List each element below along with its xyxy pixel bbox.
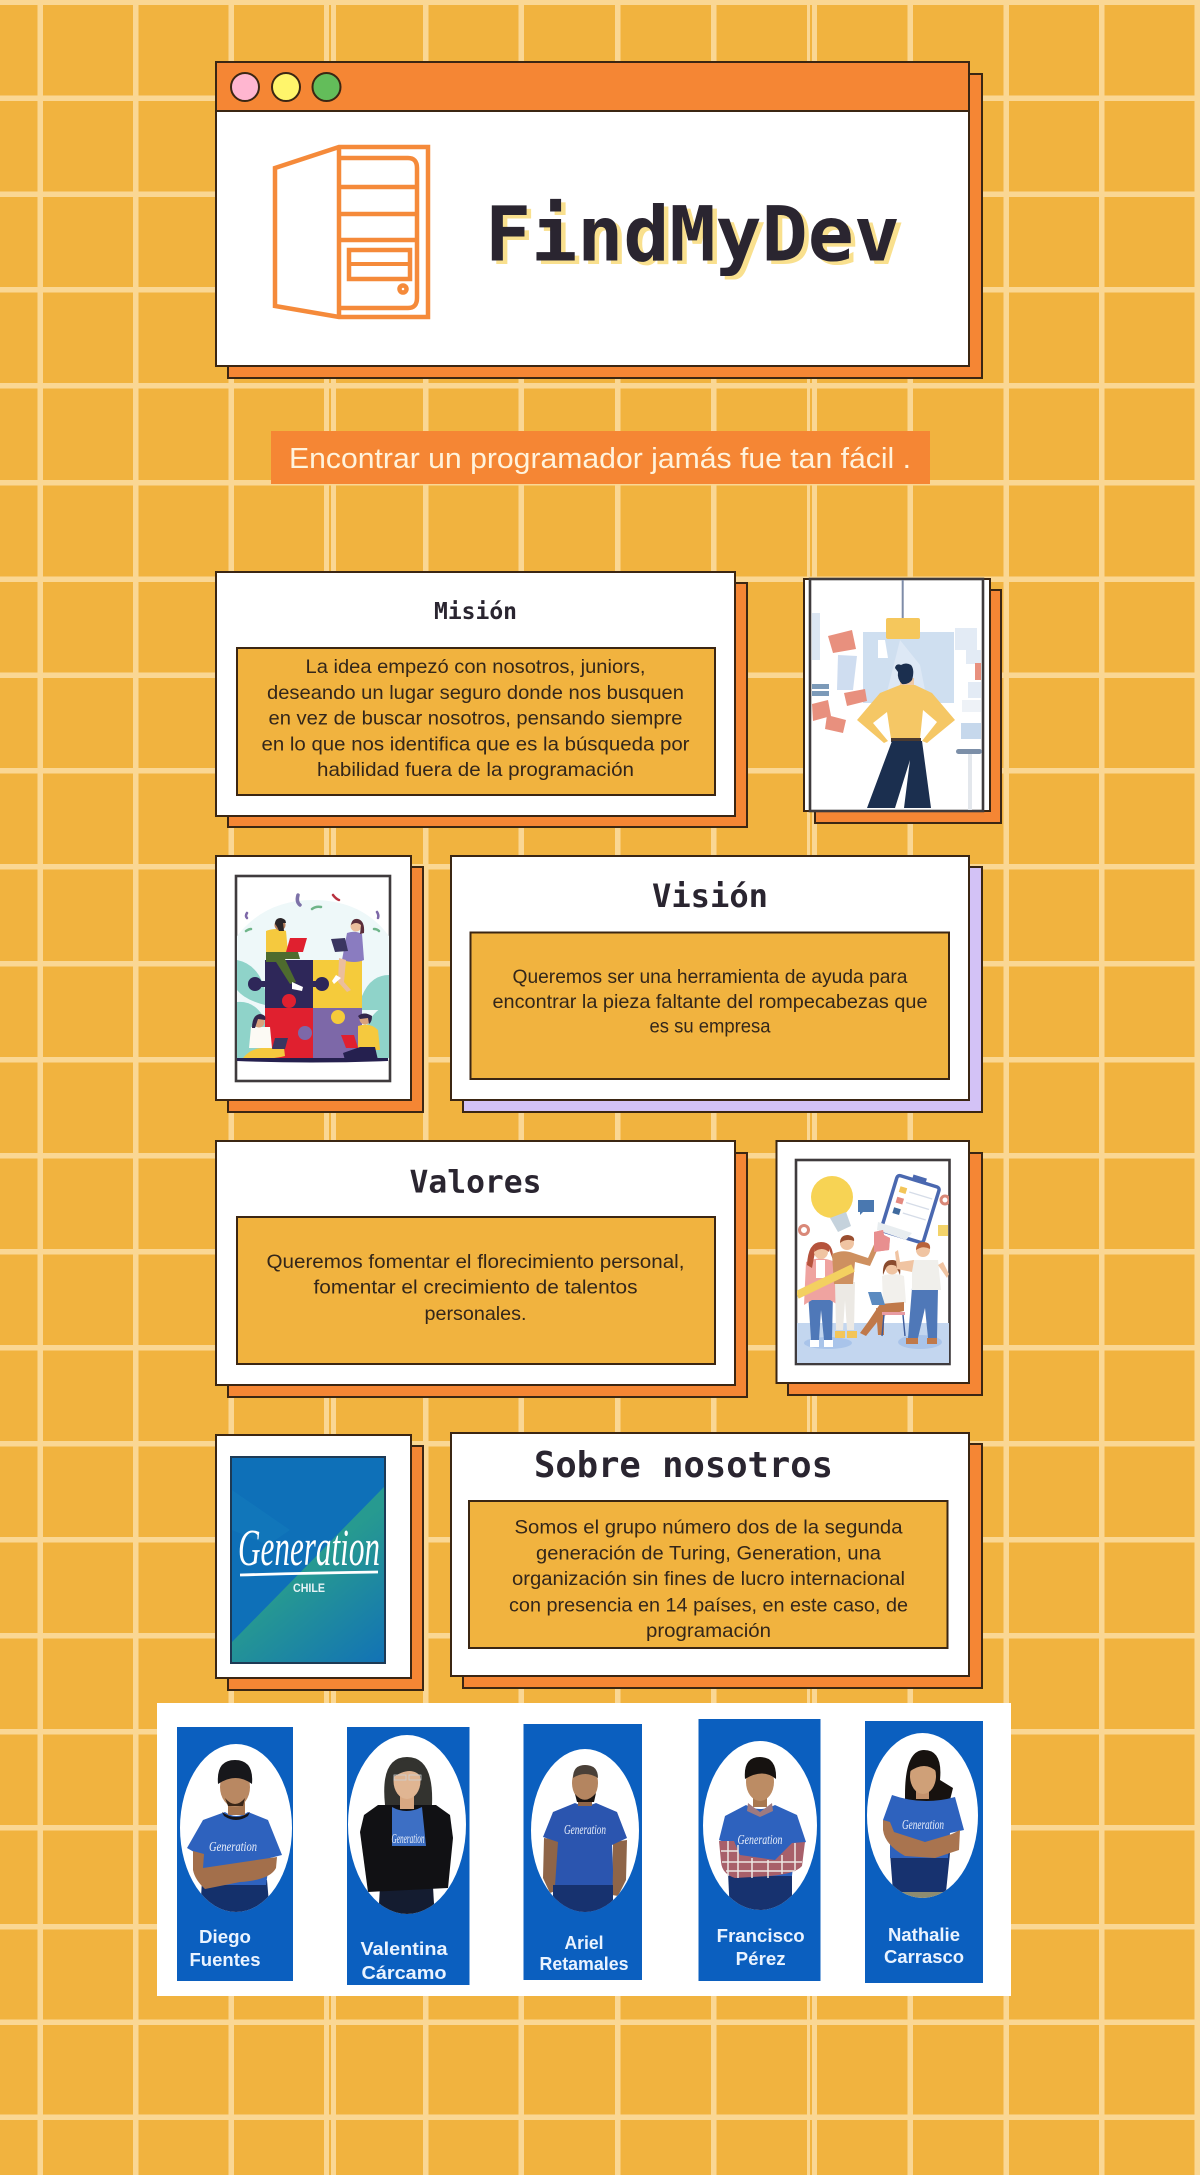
text: misión: en vez de buscar nosotros, pensando siempre [268,708,682,730]
tagline: Encontrar un programador jamás fue tan fácil . [289,443,911,475]
text: visión: es su empresa [650,1016,771,1038]
team card: Ariel Retamales: Retamales [540,1954,628,1974]
heading: misión: Misión [434,599,517,625]
team card: Nathalie Carrasco: Nathalie [888,1925,960,1945]
text: sobre nosotros [509,1516,908,1642]
text: misión: deseando un lugar seguro donde nos busquen [267,682,684,704]
text: misión [262,656,690,781]
panel: team [157,1703,1011,1996]
text: valores: Queremos fomentar el florecimiento personal, [266,1251,684,1273]
text: misión: habilidad fuera de la programación [317,759,634,781]
team card: Francisco Pérez: Francisco [717,1926,805,1946]
title: FindMyDev [485,190,900,278]
title: FindMyDev [490,193,904,282]
text: visión: encontrar la pieza faltante del rompecabezas que [492,991,928,1013]
logo: generation chile: CHILE [293,1581,325,1595]
text: misión: La idea empezó con nosotros, juniors, [306,656,646,678]
team card: Diego Fuentes: Diego [199,1927,251,1947]
text: sobre nosotros: generación de Turing, Generation, una [536,1542,881,1564]
team card: Ariel Retamales: Generation [564,1823,606,1838]
panel: visión [451,856,982,1112]
team card: Ariel Retamales [524,1724,642,1980]
text: valores: personales. [424,1303,526,1325]
icon: window buttons [231,73,340,101]
image card: puzzle team [216,856,423,1112]
text: sobre nosotros: Somos el grupo número dos de la segunda [514,1516,903,1538]
heading: valores: Valores [410,1164,542,1200]
team card: Diego Fuentes: Generation [209,1840,257,1855]
team card: Valentina Cárcamo: Cárcamo [362,1963,446,1983]
team card: Valentina Cárcamo: Valentina [360,1939,449,1959]
team card: Nathalie Carrasco [865,1721,983,1983]
text: sobre nosotros: organización sin fines de lucro internacional [512,1568,905,1590]
illustration: puzzle with people [237,895,389,1062]
text: valores: fomentar el crecimiento de talentos [314,1276,638,1298]
team card: Ariel Retamales: Ariel [564,1933,604,1953]
image card: man looking at a wall board [803,578,1002,824]
panel: valores [216,1141,747,1397]
illustration: team and clipboard [797,1170,949,1364]
team card: Nathalie Carrasco: Generation [902,1818,944,1833]
text: misión: en lo que nos identifica que es la búsqueda por [262,734,690,756]
team card: Valentina Cárcamo: Generation [392,1832,424,1847]
team card: Diego Fuentes [177,1727,293,1981]
icon: computer tower [275,147,428,317]
logo: generation chile [231,1457,385,1663]
text: sobre nosotros: programación [646,1620,771,1642]
text: sobre nosotros: con presencia en 14 países, en este caso, de [509,1594,908,1616]
heading: sobre nosotros: Sobre nosotros [534,1445,833,1486]
text: valores [266,1251,684,1325]
team card: Francisco Pérez: Pérez [736,1949,786,1969]
heading: visión: Visión [652,877,768,915]
team card: Francisco Pérez: Generation [738,1833,782,1848]
tagline [271,431,930,484]
panel: misión [216,572,747,827]
team card: Diego Fuentes: Fuentes [190,1950,260,1970]
image card: team with idea bulb [776,1141,982,1395]
text: visión [492,966,928,1038]
panel: header window [216,62,982,378]
text: visión: Queremos ser una herramienta de ayuda para [512,966,908,988]
team card: Valentina Cárcamo [347,1727,470,1985]
team card: Francisco Pérez [698,1719,820,1981]
image card: generation logo [216,1435,423,1690]
panel: sobre nosotros [451,1433,982,1688]
illustration: man and board [812,580,982,810]
team card: Nathalie Carrasco: Carrasco [884,1947,964,1967]
logo: generation chile: Generation [238,1520,380,1577]
